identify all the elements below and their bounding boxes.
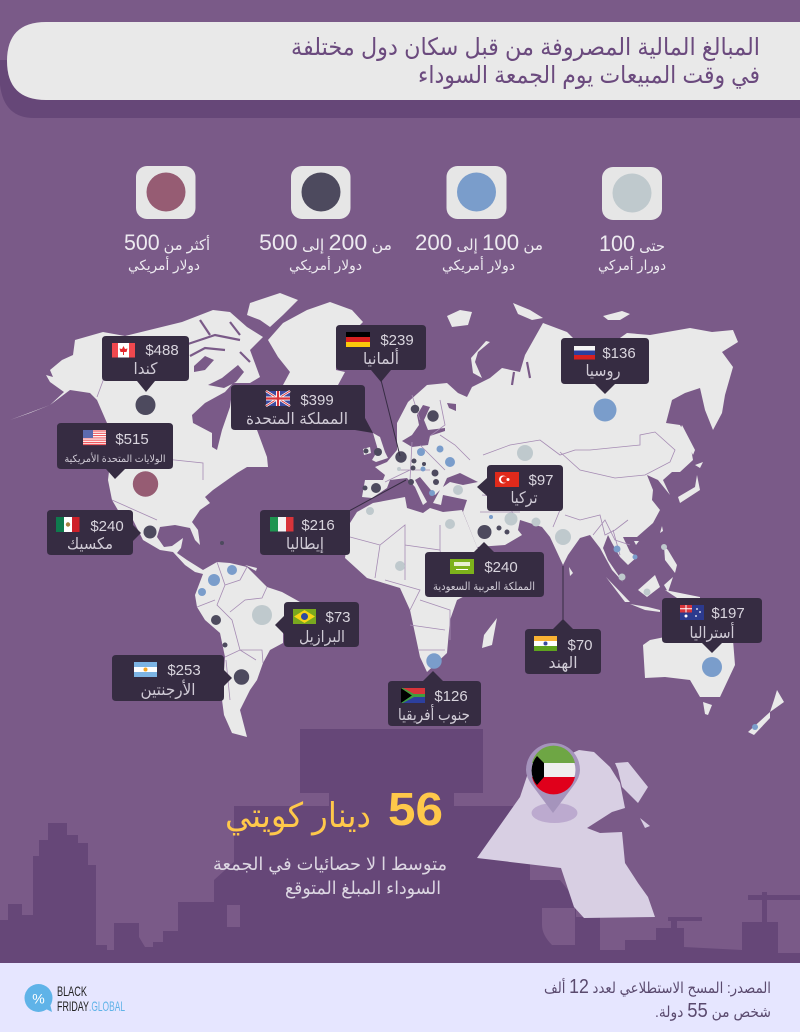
callout: Russia: روسيا: [586, 363, 620, 381]
legend: 100 to 200: دولار أمريكي: [442, 256, 515, 274]
title: في وقت المبيعات يوم الجمعة السوداء: [418, 62, 760, 89]
callout: South Africa: $126: [434, 688, 468, 705]
flag: Italy: [270, 517, 294, 532]
callout: Argentina: الأرجنتين: [140, 679, 196, 700]
callout: South Africa: جنوب أفريقيا: [398, 704, 470, 725]
logo: [24, 983, 125, 1014]
callout: Russia: $136: [602, 345, 636, 362]
callout: Brazil: [275, 602, 359, 647]
logo: .GLOBAL: [89, 998, 125, 1014]
callout: United Kingdom: [231, 385, 373, 433]
country borders: [97, 370, 675, 700]
legend: over 500: دولار أمريكي: [128, 256, 200, 274]
legend: over 500: [124, 166, 210, 274]
logo: %: [32, 990, 45, 1006]
callout: Saudi Arabia: [425, 542, 544, 597]
callout: Italy: $216: [301, 517, 335, 534]
skyline background: [0, 729, 800, 963]
world map: [10, 293, 784, 737]
callout: Germany: $239: [380, 332, 414, 349]
flag: Australia: [680, 605, 704, 620]
flag: Mexico: [56, 517, 80, 532]
callout: Canada: $488: [145, 342, 179, 359]
callout: Turkey: $97: [528, 472, 554, 489]
callout: Brazil: البرازيل: [299, 629, 345, 647]
land masses: [10, 293, 784, 737]
title: المبالغ المالية المصروفة من قبل سكان دول مختلفة: [291, 34, 760, 61]
callout: India: $70: [567, 637, 593, 654]
flag: UK: [266, 391, 290, 406]
description: [213, 854, 447, 899]
flag: India: [534, 636, 557, 651]
callout: India: [525, 619, 601, 674]
flag: Saudi Arabia: [450, 559, 474, 574]
flag: Kuwait: [532, 746, 576, 794]
source note: المصدر: المسح الاستطلاعي لعدد 12 ألف: [544, 976, 771, 998]
callout: India: الهند: [548, 655, 578, 673]
callout: Turkey: [477, 465, 563, 511]
map of Kuwait: [477, 750, 655, 918]
callout: Russia: [561, 338, 649, 394]
callout: Saudi Arabia: المملكة العربية السعودية: [433, 581, 535, 593]
legend: up to 100: [598, 167, 666, 274]
callout: Germany: [336, 325, 426, 382]
inland seas and arctic channels: [185, 320, 530, 487]
callout: Italy: إيطاليا: [286, 536, 324, 553]
callout: South Africa: [388, 671, 481, 726]
legend: 200 to 500: دولار أمريكي: [289, 256, 362, 274]
flag: Turkey: [495, 472, 519, 487]
leader lines: [349, 380, 563, 622]
callout: Brazil: $73: [325, 609, 351, 626]
flag: USA: [83, 430, 106, 445]
kuwait map: [477, 743, 655, 918]
callout: Australia: [662, 598, 762, 653]
callout: USA: $515: [115, 431, 149, 448]
legend: 100 to 200: من 100 إلى 200: [415, 230, 543, 255]
logo: FRIDAY: [57, 998, 89, 1014]
flag: Russia: [574, 346, 595, 360]
callout: Australia: $197: [711, 605, 745, 622]
flag: Brazil: [293, 609, 316, 624]
title banner: [0, 22, 800, 118]
callout: Italy: [260, 510, 350, 555]
footer: [0, 963, 800, 1032]
headline figure: 56: [388, 783, 443, 835]
source note: شخص من 55 دولة.: [655, 1000, 771, 1022]
legend: over 500: أكثر من 500: [124, 230, 210, 255]
callout: Mexico: مكسيك: [67, 536, 113, 553]
callout: Argentina: $253: [167, 662, 201, 679]
description: السوداء المبلغ المتوقع: [285, 878, 441, 899]
location pin: [526, 743, 580, 823]
callout: United Kingdom: $399: [300, 392, 334, 409]
legend: 200 to 500: [259, 166, 392, 274]
logo: BLACK: [57, 983, 87, 999]
callout: Saudi Arabia: $240: [484, 559, 518, 576]
callout: Germany: ألمانيا: [363, 348, 399, 368]
headline figure: [225, 783, 443, 836]
callout: USA: [57, 423, 173, 479]
small data points: [198, 405, 758, 730]
legend: 200 to 500: من 200 إلى 500: [259, 230, 392, 255]
legend: up to 100: حتى 100: [599, 231, 665, 256]
title: [291, 34, 760, 89]
callout: Canada: كندا: [134, 361, 158, 378]
callout: Turkey: تركيا: [510, 490, 538, 508]
callout: Canada: [102, 336, 189, 392]
callout: United Kingdom: المملكة المتحدة: [246, 411, 348, 428]
legend: [124, 166, 666, 274]
country dots: [133, 395, 722, 685]
legend: 100 to 200: [415, 166, 543, 274]
headline figure: دينار كويتي: [225, 797, 371, 836]
flag: Argentina: [134, 662, 157, 677]
flag: Germany: [346, 332, 370, 347]
callout: Australia: أستراليا: [690, 622, 734, 643]
description: متوسط ا لا حصائيات في الجمعة: [213, 854, 447, 875]
flag: Canada: [112, 343, 135, 358]
source note: [544, 976, 771, 1022]
callout: Mexico: $240: [90, 518, 124, 535]
callout: Mexico: [47, 510, 141, 555]
callout: Argentina: [112, 655, 232, 701]
callout: USA: الولايات المتحدة الأمريكية: [64, 452, 166, 465]
flag: South Africa: [401, 688, 425, 703]
legend: up to 100: دورار أمركي: [598, 256, 666, 274]
